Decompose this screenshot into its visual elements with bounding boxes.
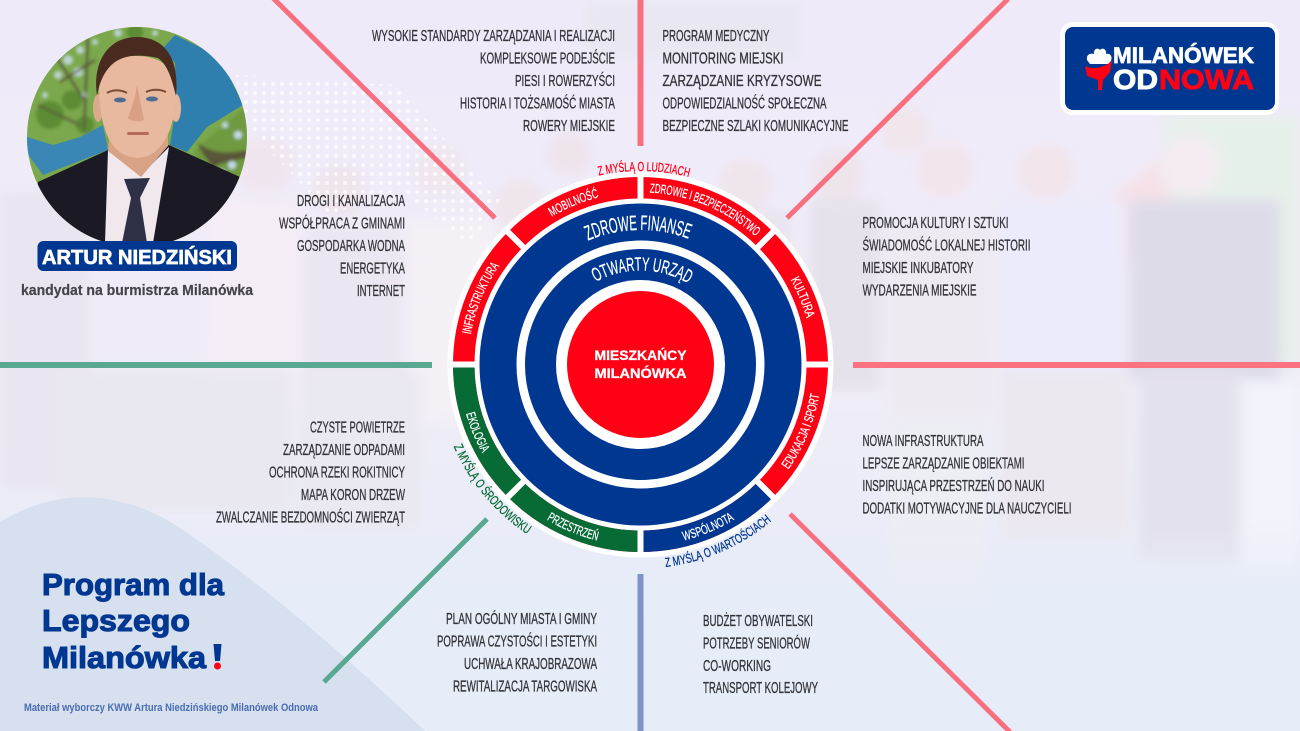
core: mieszkańcy [567, 291, 714, 438]
ring: zdrowe finanse [480, 204, 802, 526]
center text [594, 347, 687, 381]
ring labels: ZDROWE FINANSE [583, 215, 693, 241]
text block: infrastructure: DROGI I KANALIZACJA [297, 193, 405, 210]
title: Milanówka [42, 640, 207, 675]
text block: top right branch: PROGRAM MEDYCZNY [662, 28, 770, 45]
icon: leaf and ribbon [1085, 49, 1112, 90]
name banner: ARTUR NIEDZIŃSKI [42, 246, 232, 269]
circular diagram [448, 160, 834, 568]
ring labels: MOBILNOŚĆ [548, 186, 598, 216]
text block: culture: ŚWIADOMOŚĆ LOKALNEJ HISTORII [862, 236, 1030, 254]
footer note: Materiał wyborczy KWW Artura Niedzińskiego Milanówek Odnowa [24, 702, 319, 714]
text block: community: CO-WORKING [703, 658, 771, 675]
logo: OD [1113, 64, 1158, 95]
ring labels: OTWARTY URZĄD [592, 257, 692, 284]
text block: community: POTRZEBY SENIORÓW [703, 634, 811, 652]
title: Lepszego [42, 603, 190, 638]
text block: top right branch: ODPOWIEDZIALNOŚĆ SPOŁECZNA [662, 94, 827, 112]
ring: otwarty urząd [525, 249, 756, 480]
ring labels: ZDROWIE I BEZPIECZEŃSTWO [650, 184, 760, 236]
text block: top left branch: PIESI I ROWERZYŚCI [515, 71, 615, 90]
shirt [105, 147, 169, 243]
logo [1060, 22, 1279, 115]
text block: top left branch [372, 28, 615, 135]
text block: infrastructure [279, 193, 405, 300]
subtitle: candidate role: kandydat na burmistrza Milanówka [21, 283, 254, 299]
text block: top right branch: BEZPIECZNE SZLAKI KOMUNIKACYJNE [662, 118, 848, 135]
text block: infrastructure: WSPÓŁPRACA Z GMINAMI [279, 214, 405, 232]
text block: top left branch: HISTORIA I TOŻSAMOŚĆ MIASTA [460, 94, 615, 112]
name banner [38, 241, 237, 271]
suit [38, 145, 240, 241]
text block: ecology [216, 420, 406, 526]
ring labels [462, 160, 820, 540]
text block: community: TRANSPORT KOLEJOWY [703, 680, 818, 697]
text block: space: UCHWAŁA KRAJOBRAZOWA [464, 656, 597, 673]
text block: infrastructure: GOSPODARKA WODNA [297, 238, 405, 255]
tie [122, 178, 150, 243]
title [42, 567, 225, 675]
text block: community: BUDŻET OBYWATELSKI [703, 611, 813, 630]
text block: infrastructure: INTERNET [357, 283, 405, 300]
text block: culture [862, 215, 1030, 300]
ring labels: INFRASTRUKTURA [462, 262, 500, 334]
text block: ecology: ZARZĄDZANIE ODPADAMI [283, 442, 405, 459]
text block: culture: PROMOCJA KULTURY I SZTUKI [862, 215, 1008, 232]
exclamation mark [214, 644, 222, 670]
text block: education [862, 433, 1072, 518]
ring labels: WSPÓLNOTA [681, 512, 734, 540]
text block: top right branch [662, 28, 848, 135]
text block: ecology: CZYSTE POWIETRZE [310, 420, 405, 436]
outer curved captions: Z MYŚLĄ O LUDZIACH [597, 160, 690, 177]
candidate portrait [27, 24, 250, 250]
text block: space: PLAN OGÓLNY MIASTA I GMINY [446, 609, 597, 628]
text block: ecology: ZWALCZANIE BEZDOMNOŚCI ZWIERZĄT [216, 508, 405, 526]
text block: education: INSPIRUJĄCA PRZESTRZEŃ DO NAUKI [862, 476, 1044, 495]
outer curved captions [454, 160, 772, 568]
text block: space: POPRAWA CZYSTOŚCI I ESTETYKI [437, 632, 597, 650]
text block: ecology: OCHRONA RZEKI ROKITNICY [269, 464, 405, 482]
text block: education: NOWA INFRASTRUKTURA [862, 433, 984, 450]
text block: community [703, 611, 818, 697]
decorative halftone dots [235, 75, 500, 245]
text block: top left branch: WYSOKIE STANDARDY ZARZĄDZANIA I REALIZACJI [372, 28, 615, 45]
logo: MILANÓWEK [1113, 43, 1254, 68]
face [99, 56, 176, 158]
ring labels: EKOLOGIA [466, 412, 490, 454]
text block: culture: MIEJSKIE INKUBATORY [862, 260, 974, 277]
text block: top right branch: MONITORING MIEJSKI [662, 50, 784, 68]
text block: top left branch: ROWERY MIEJSKIE [523, 118, 615, 135]
text block: culture: WYDARZENIA MIEJSKIE [862, 282, 976, 300]
text block: ecology: MAPA KORON DRZEW [301, 487, 406, 504]
ears [93, 94, 103, 122]
text block: top left branch: KOMPLEKSOWE PODEJŚCIE [480, 48, 615, 68]
ring labels: KULTURA [790, 276, 814, 318]
text block: education: DODATKI MOTYWACYJNE DLA NAUCZYCIELI [862, 500, 1072, 518]
text block: space [437, 609, 597, 696]
title: Program dla [42, 567, 225, 602]
outer curved captions: Z MYŚLĄ O WARTOŚCIACH [664, 514, 772, 568]
text block: space: REWITALIZACJA TARGOWISKA [453, 678, 597, 696]
right-hand tree [195, 105, 247, 185]
ring labels: EDUKACJA I SPORT [781, 393, 820, 470]
decorative bottom-left shape [0, 497, 425, 731]
text block: top right branch: ZARZĄDZANIE KRYZYSOWE [662, 73, 822, 90]
text block: infrastructure: ENERGETYKA [340, 260, 405, 278]
center text: MIESZKAŃCY [594, 347, 687, 363]
hair [96, 37, 177, 96]
outer ring segments [450, 174, 830, 554]
outer curved captions: Z MYŚLĄ O ŚRODOWISKU [454, 443, 532, 533]
ring labels: PRZESTRZEŃ [547, 512, 599, 540]
neck [108, 130, 168, 177]
center text: MILANÓWKA [594, 364, 686, 381]
text block: education: LEPSZE ZARZĄDZANIE OBIEKTAMI [862, 456, 1024, 472]
logo: NOWA [1159, 64, 1254, 95]
